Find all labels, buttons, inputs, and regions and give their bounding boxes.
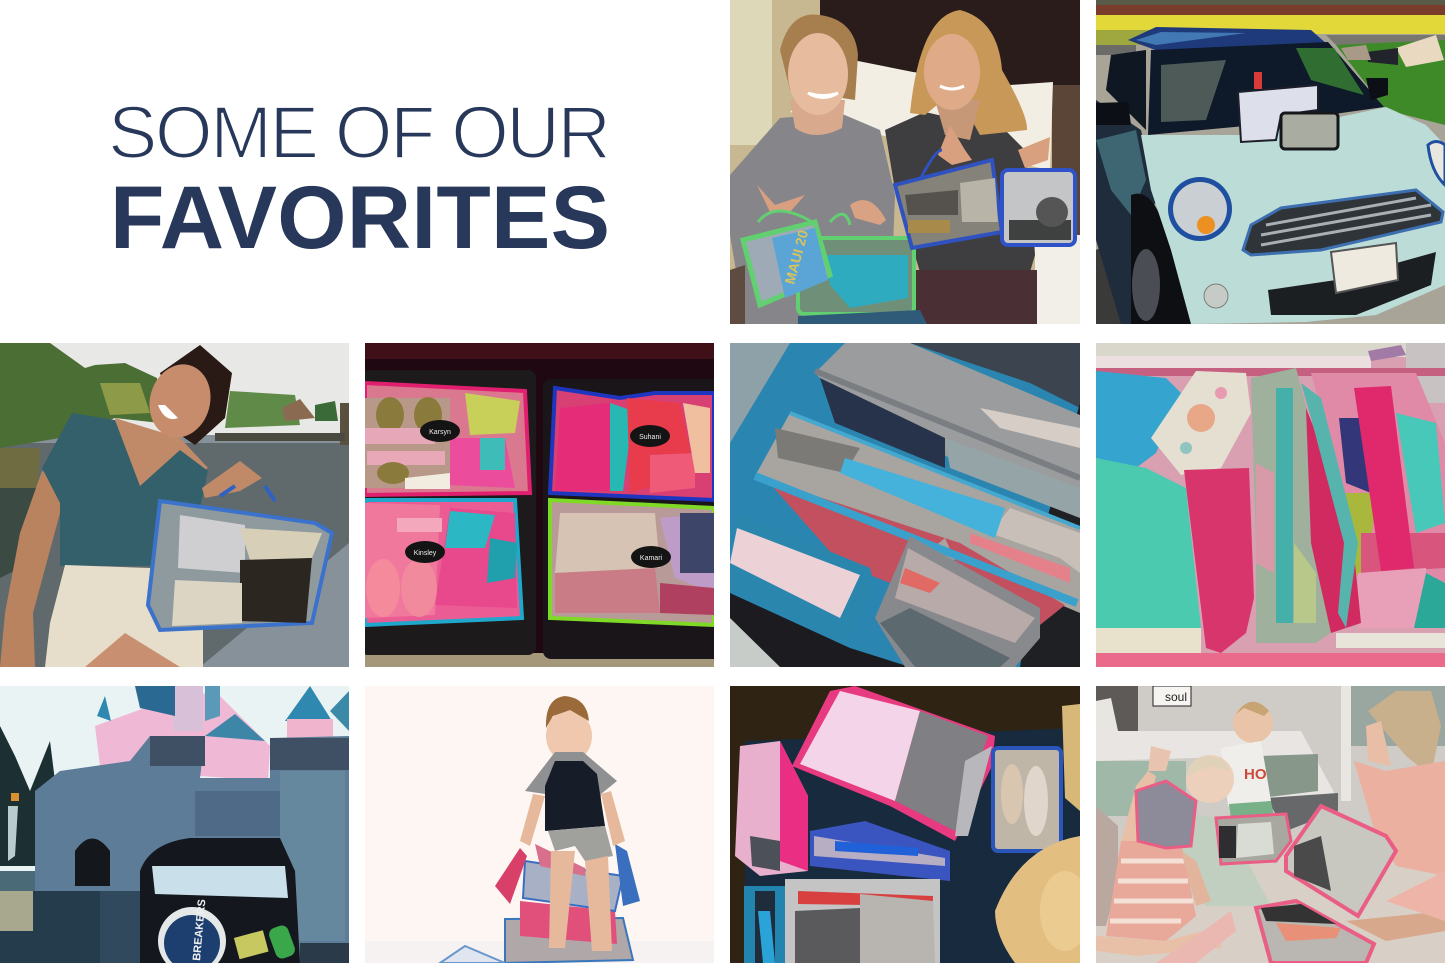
name tag: Kamari: [640, 555, 663, 562]
wall sign: soul: [1165, 690, 1187, 704]
small pink cube held by girl: [1136, 781, 1196, 848]
bedding: [1096, 731, 1338, 831]
wall sign: [1153, 686, 1191, 706]
blue packing cube one: [895, 150, 1002, 248]
clear blue-trimmed cube: [148, 486, 332, 630]
name tag: Karsyn: [429, 429, 451, 436]
headboard and pillow: [1096, 686, 1138, 731]
large pink cube: [792, 686, 995, 841]
photo: toddler sitting on a stack of cubes: [365, 686, 714, 963]
photo: grey and blue cubes in a blue suitcase: [730, 343, 1080, 667]
packing cubes on the hood: [1238, 72, 1338, 149]
right compartment: [1311, 373, 1445, 628]
cube: green trim with sandals: [550, 500, 714, 625]
name tag: Kinsley: [414, 550, 437, 557]
name tag: [631, 546, 671, 568]
top grey cube: [815, 343, 1080, 518]
name tag: [420, 420, 460, 442]
photo: cubes in a dark suitcase with a straw hat: [730, 686, 1080, 963]
photo: pink suitcase with patterned pouches: [1096, 343, 1445, 667]
denim jeans: [798, 310, 927, 324]
woman in grey sweater: [730, 14, 895, 324]
mother in pink: [1346, 691, 1445, 941]
pink upper castle: [95, 686, 349, 781]
title: FAVORITES: [110, 167, 610, 267]
cube: pink sandals and tie-dye: [365, 383, 530, 495]
pink left pocket: [1184, 468, 1254, 653]
navy suitcase: [745, 728, 1080, 963]
girl with glasses: [1181, 755, 1271, 906]
photo: two women holding packing cubes: [730, 0, 1080, 324]
left pink bag: [1096, 806, 1118, 926]
teal cube bottom left: [744, 886, 790, 963]
green packing cube one: [743, 211, 830, 305]
name tag: [630, 425, 670, 447]
boy in white shirt: HO: [1244, 766, 1267, 783]
title: SOME OF OUR: [108, 91, 611, 174]
roadside rocks: [1341, 35, 1444, 67]
photo: woman by a lake holding a cube: [0, 343, 349, 667]
toddler: [520, 696, 625, 951]
green packing cube two: [798, 214, 914, 314]
white pillows: [790, 60, 1053, 170]
woman with blonde hair: [885, 10, 1050, 324]
medium pink cube: [1216, 814, 1291, 864]
grey clothing cube: [785, 879, 940, 963]
bottom left cube: [730, 513, 875, 643]
name tag: [405, 541, 445, 563]
photo: packing cubes on a mint Mini Cooper: [1096, 0, 1445, 324]
banner and lamp: [8, 793, 19, 861]
suitcase lower rim: [1096, 633, 1445, 667]
car headlight and grille: [1168, 142, 1445, 315]
bottom right cube: [875, 536, 1040, 667]
dark interior: [910, 343, 1080, 408]
shoes cube: [993, 748, 1061, 851]
photo: castle with a cube in front: [0, 686, 349, 963]
name tag: Suhani: [639, 434, 661, 441]
car side and wheel: [1096, 100, 1196, 324]
left pink cube: [735, 741, 808, 876]
right suitcase: [543, 379, 723, 659]
shoreline trees: [0, 343, 349, 578]
roof and windscreen: [1096, 27, 1388, 135]
cube: teal trim with pink shoes: [365, 500, 522, 625]
woven basket: [1062, 704, 1080, 811]
room back wall and pillar: [1341, 686, 1445, 801]
blue cube: [810, 821, 950, 881]
bottom pink cube: [1256, 901, 1374, 963]
tokidoki pouch: [1151, 371, 1251, 475]
middle cube with pink contents: [755, 413, 1080, 633]
cube with sunscreen and tub: BREAKERS: [191, 899, 208, 961]
cube: blue trim with swimsuits: [550, 388, 714, 500]
cube with sunscreen and tub: [140, 838, 300, 963]
photo: mother and kids with pink cubes on a bed: [1096, 686, 1445, 963]
stack of cubes: [440, 844, 640, 963]
pale bedding corner: [730, 618, 780, 667]
straw hat: [995, 836, 1090, 963]
green packing cube one: MAUI 20: [781, 228, 811, 286]
woman in a teal T-shirt: [0, 345, 262, 667]
blue packing cube two: [1002, 170, 1075, 245]
grey castle: [0, 736, 349, 963]
girl in striped dress: [1096, 746, 1236, 963]
pink zip edge and teal strap: [1301, 383, 1361, 633]
car body: [1141, 107, 1445, 324]
title: [108, 91, 611, 267]
photo: four colourful cubes in suitcases: [365, 343, 714, 667]
moat and wall: [0, 871, 349, 963]
boy in white shirt: [1221, 702, 1274, 818]
trees: [0, 726, 55, 866]
bag in the lid: [730, 343, 790, 443]
black suitcase edge: [730, 593, 910, 667]
large pink cube: [1286, 806, 1396, 916]
rug: [1096, 856, 1445, 963]
left suitcase: [360, 370, 536, 655]
blue and teal clothing: [1096, 371, 1201, 653]
floral zip pouch: [1251, 368, 1358, 643]
